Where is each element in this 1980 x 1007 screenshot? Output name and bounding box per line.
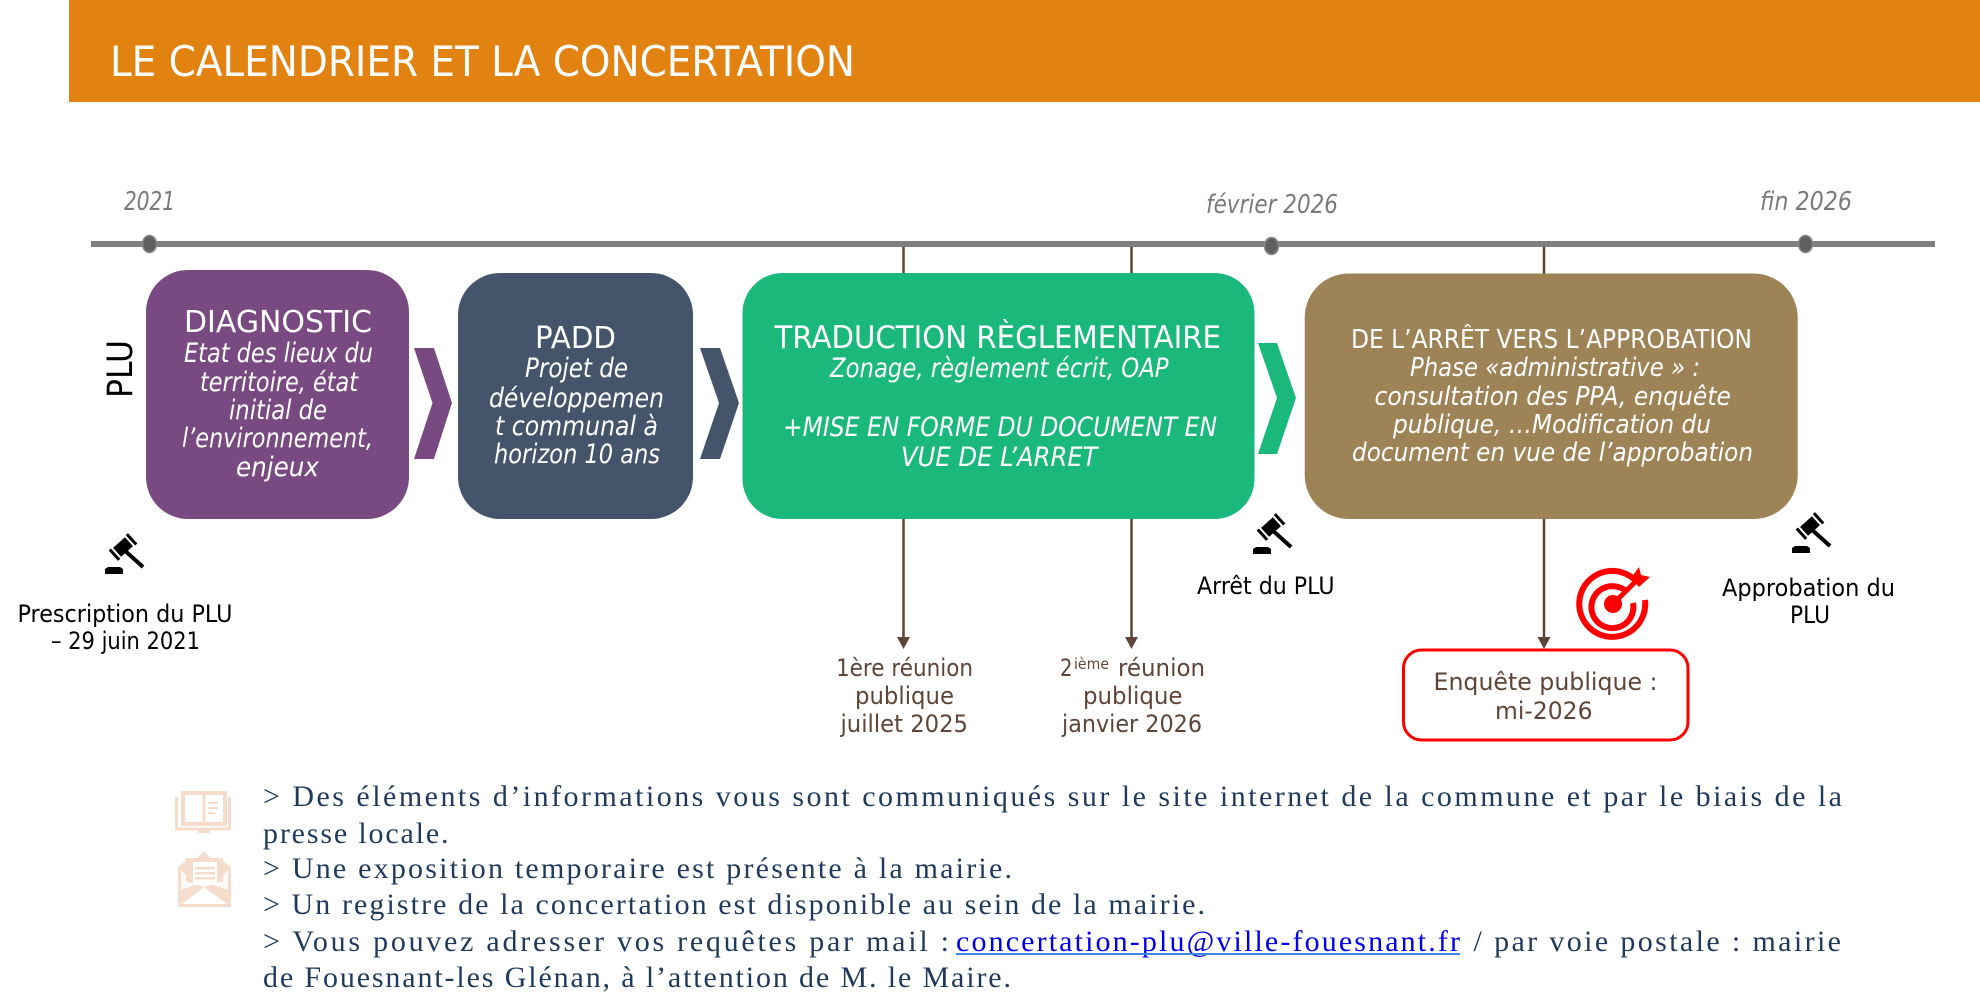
vertical label PLU: PLU [101,340,141,398]
label: 2ième réunion publique: réunion [1118,654,1205,682]
heading: de l'arrêt vers l'approbation: DE L’ARRÊT VERS L’APPROBATION [1351,323,1752,355]
text block: concertation information: > Des éléments d’informations vous sont communiqués sur le site internet de la commune et par le biais de la [263,780,1842,813]
icon: gavel arrêt [1253,513,1291,554]
heading: diagnostic: DIAGNOSTIC [184,305,372,340]
text block: concertation information: > Une exposition temporaire est présente à la mairie. [263,852,1012,885]
text: diagnostic description: l’environnement, [182,423,373,454]
text: mise en forme [783,412,1217,473]
text: phase administrative [1352,353,1753,468]
text: PADD description: t communal à [495,411,658,442]
text: mise en forme: +MISE EN FORME DU DOCUMENT EN [783,412,1217,443]
text: mise en forme: VUE DE L’ARRET [901,442,1100,473]
text: diagnostic description: initial de [229,395,327,426]
panel: PADD [458,273,693,519]
date label fin 2026: fin 2026 [1760,187,1852,217]
text: phase administrative: publique, …Modification du [1392,410,1711,440]
panel: traduction réglementaire [742,273,1254,519]
text: phase administrative: Phase «administrative » : [1410,353,1700,383]
label: 1ère réunion publique [836,654,973,738]
label: 2ième réunion publique [1060,654,1205,738]
chevron: green [1258,343,1296,454]
panel: diagnostic [146,270,409,519]
label: 2ième réunion publique: janvier 2026 [1061,710,1202,738]
label: 2ième réunion publique: 2 [1060,654,1072,682]
timeline marker février 2026 [1264,238,1278,254]
label: arrêt du PLU: Arrêt du PLU [1197,572,1334,600]
arrow: 1ère réunion publique [897,247,910,649]
heading: PADD: PADD [535,321,616,356]
date label février 2026: février 2026 [1206,190,1338,220]
text: phase administrative: consultation des PPA, enquête [1374,382,1731,412]
panel: de l'arrêt vers l'approbation [1305,274,1798,519]
icon: open book [176,793,230,833]
text block: concertation information [263,780,1842,994]
icon: gavel prescription [105,533,143,574]
text block: concertation information: de Fouesnant-les Glénan, à l’attention de M. le Maire. [263,961,1011,994]
label: 1ère réunion publique: juillet 2025 [840,710,968,738]
callout text [1434,668,1658,725]
header banner [69,0,1980,102]
text: diagnostic description: enjeux [236,452,320,483]
icon: gavel approbation [1792,512,1830,553]
label: approbation du PLU: Approbation du [1722,574,1895,602]
label: 2ième réunion publique: ième [1074,655,1109,673]
arrow: 2ième réunion publique [1125,247,1138,649]
callout: enquête publique [1404,650,1688,740]
title: LE CALENDRIER ET LA CONCERTATION [110,37,855,86]
text: PADD description: Projet de [525,353,628,384]
icon: target [1579,567,1650,637]
date label 2021: 2021 [124,187,175,217]
label: 1ère réunion publique: 1ère réunion [836,654,973,682]
text: PADD description [489,353,664,470]
label: 1ère réunion publique: publique [855,682,954,710]
label: prescription du PLU: Prescription du PLU [18,600,232,628]
text: diagnostic description: territoire, état [200,367,359,398]
email link: concertation-plu@ville-fouesnant.fr [956,925,1460,958]
icon: open envelope with letter [178,851,231,907]
text: diagnostic description [182,338,373,483]
label: prescription du PLU [18,600,232,655]
heading: traduction réglementaire: TRADUCTION RÈGLEMENTAIRE [774,320,1221,356]
text: phase administrative: document en vue de l’approbation [1352,438,1753,468]
timeline marker 2021 [142,236,156,252]
text block: concertation information: / par voie postale : mairie [1474,925,1841,958]
text: zonage: Zonage, règlement écrit, OAP [829,353,1169,384]
timeline marker fin 2026 [1798,236,1812,252]
arrow: enquête publique [1538,247,1550,649]
timeline [91,236,1935,254]
callout text: Enquête publique : [1434,668,1658,696]
text block: concertation information: presse locale. [263,817,448,850]
label: approbation du PLU: PLU [1790,601,1830,629]
text block: concertation information: > Vous pouvez adresser vos requêtes par mail : [263,925,949,958]
text: PADD description: horizon 10 ans [494,439,660,470]
label: prescription du PLU: – 29 juin 2021 [51,627,200,655]
label: approbation du PLU [1722,574,1895,629]
text: diagnostic description: Etat des lieux du [184,338,373,369]
chevron: slate [700,348,739,459]
callout text: mi-2026 [1495,697,1592,725]
text: PADD description: développemen [489,383,664,414]
text block: concertation information: > Un registre de la concertation est disponible au sein de la mairie. [263,888,1205,921]
chevron: purple [414,348,452,459]
label: 2ième réunion publique: publique [1083,682,1182,710]
